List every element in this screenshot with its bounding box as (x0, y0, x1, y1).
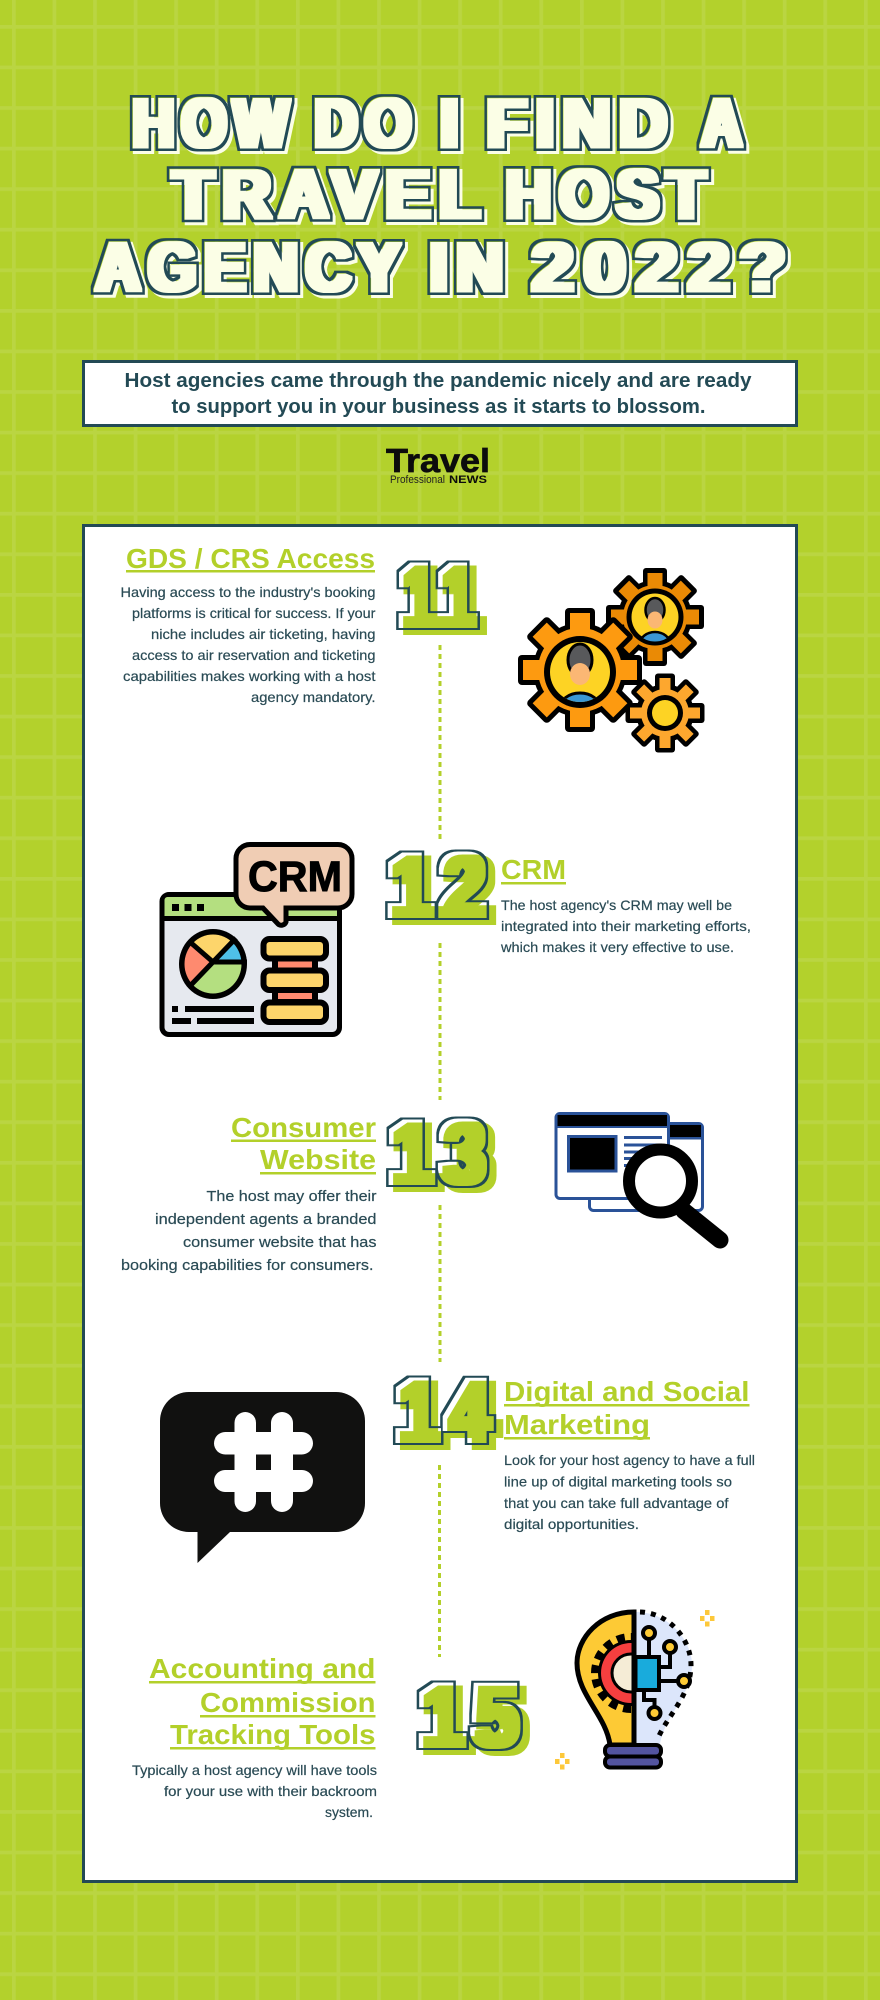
icon: hashtag speech bubble (160, 1392, 365, 1563)
body text: The host agency's CRM may well be (501, 897, 732, 913)
icon: half gear (591, 1633, 632, 1713)
section 13: Consumer Website (121, 1105, 720, 1274)
title: TRAVEL (172, 155, 488, 233)
body text: for your use with their backroom (164, 1783, 377, 1799)
icon: sparkle bottom left (555, 1753, 570, 1770)
icon: gears with people (518, 568, 704, 752)
logo: Travel Professional News: Professional (390, 474, 445, 486)
title: A (702, 84, 748, 162)
body text: integrated into their marketing efforts, (501, 918, 751, 934)
body text: digital opportunities. (504, 1516, 639, 1532)
icon: bulb left half (577, 1612, 634, 1745)
body text (500, 897, 751, 955)
icon: big gear person (564, 642, 596, 702)
body text: agency mandatory. (251, 689, 376, 705)
title: 2022? (532, 228, 796, 306)
body text: Look for your host agency to have a full (504, 1452, 755, 1468)
intro box: to support you in your business as it starts to blossom. (172, 396, 706, 418)
icon: top gear (606, 568, 704, 666)
heading: Accounting and Commission Tracking Tools: Commission (200, 1687, 376, 1718)
number 12: 12 (387, 838, 493, 934)
icon: half gear half circuit lightbulb (555, 1610, 714, 1770)
body text (120, 584, 376, 705)
body text: consumer website that has (183, 1234, 376, 1251)
number 14: 14 (395, 1363, 497, 1459)
icon: top gear person (642, 596, 668, 642)
panel: content card (84, 526, 796, 1882)
icon: window (162, 894, 340, 1034)
icon: back window (590, 1124, 703, 1210)
intro box (84, 362, 796, 426)
title: HOW (132, 84, 296, 162)
heading: Digital and Social Marketing (504, 1376, 750, 1440)
icon: CRM dashboard (162, 844, 352, 1034)
title: AGENCY (96, 228, 408, 306)
logo: Travel Professional News: NEWS (449, 474, 487, 486)
body text: independent agents a branded (155, 1211, 376, 1228)
body text: that you can take full advantage of (504, 1495, 729, 1511)
body text: capabilities makes working with a host (123, 668, 376, 684)
body text (121, 1188, 376, 1274)
section 11: GDS / CRS Access (120, 543, 704, 752)
icon: bulb base (605, 1745, 661, 1768)
heading: Consumer Website: Website (260, 1144, 376, 1175)
body text (504, 1452, 755, 1532)
icon: websites with magnifier (556, 1114, 720, 1240)
body text: which makes it very effective to use. (500, 939, 734, 955)
body text: line up of digital marketing tools so (504, 1474, 732, 1490)
heading: Accounting and Commission Tracking Tools (149, 1653, 376, 1750)
icon: big gear (518, 608, 642, 732)
heading: GDS / CRS Access: GDS / CRS Access (126, 543, 375, 574)
chart: pie (179, 929, 247, 999)
title: HOST (506, 155, 714, 233)
icon: circuit (636, 1627, 690, 1719)
heading: Accounting and Commission Tracking Tools: Tracking Tools (170, 1719, 376, 1750)
icon: lower gear (626, 674, 704, 752)
heading: Consumer Website: Consumer (231, 1112, 376, 1143)
icon: CRM speech bubble (236, 844, 352, 925)
title: I (440, 84, 468, 162)
section 14: Digital and Social Marketing (160, 1363, 755, 1563)
chart: stacked bars (264, 939, 326, 1022)
intro box: Host agencies came through the pandemic nicely and are ready (124, 370, 752, 392)
icon: sparkle top right (700, 1610, 714, 1626)
icon: front window (556, 1114, 668, 1198)
title (96, 84, 796, 306)
section 12: CRM (162, 838, 751, 1034)
title: DO (314, 84, 418, 162)
section 15: Accounting and Commission Tracking Tools (132, 1610, 714, 1820)
body text: booking capabilities for consumers. (121, 1257, 374, 1274)
icon: magnifier (629, 1150, 720, 1240)
body text: system. (325, 1804, 373, 1820)
heading: CRM: CRM (501, 854, 566, 885)
body text (132, 1762, 377, 1820)
timeline dashed line (438, 645, 442, 1657)
number 15: 15 (418, 1668, 526, 1764)
icon: bulb right half (636, 1612, 692, 1744)
body text: niche includes air ticketing, having (151, 626, 376, 642)
title: IN (430, 228, 512, 306)
logo: Travel Professional News: Travel (386, 442, 490, 479)
body text: The host may offer their (206, 1188, 376, 1205)
body text: access to air reservation and ticketing (132, 647, 376, 663)
number 13: 13 (388, 1105, 493, 1201)
heading: Accounting and Commission Tracking Tools: Accounting and (149, 1653, 376, 1684)
icon: bulb dotted outline (640, 1612, 691, 1738)
heading: Digital and Social Marketing: Digital and Social (504, 1376, 750, 1407)
body text: Typically a host agency will have tools (132, 1762, 377, 1778)
heading: Digital and Social Marketing: Marketing (504, 1409, 650, 1440)
body text: Having access to the industry's booking (120, 584, 376, 600)
title: FIND (486, 84, 676, 162)
icon: CRM speech bubble: CRM (248, 853, 342, 901)
body text: platforms is critical for success. If your (132, 605, 376, 621)
heading: Consumer Website (231, 1112, 376, 1175)
number 11: 11 (399, 548, 481, 644)
